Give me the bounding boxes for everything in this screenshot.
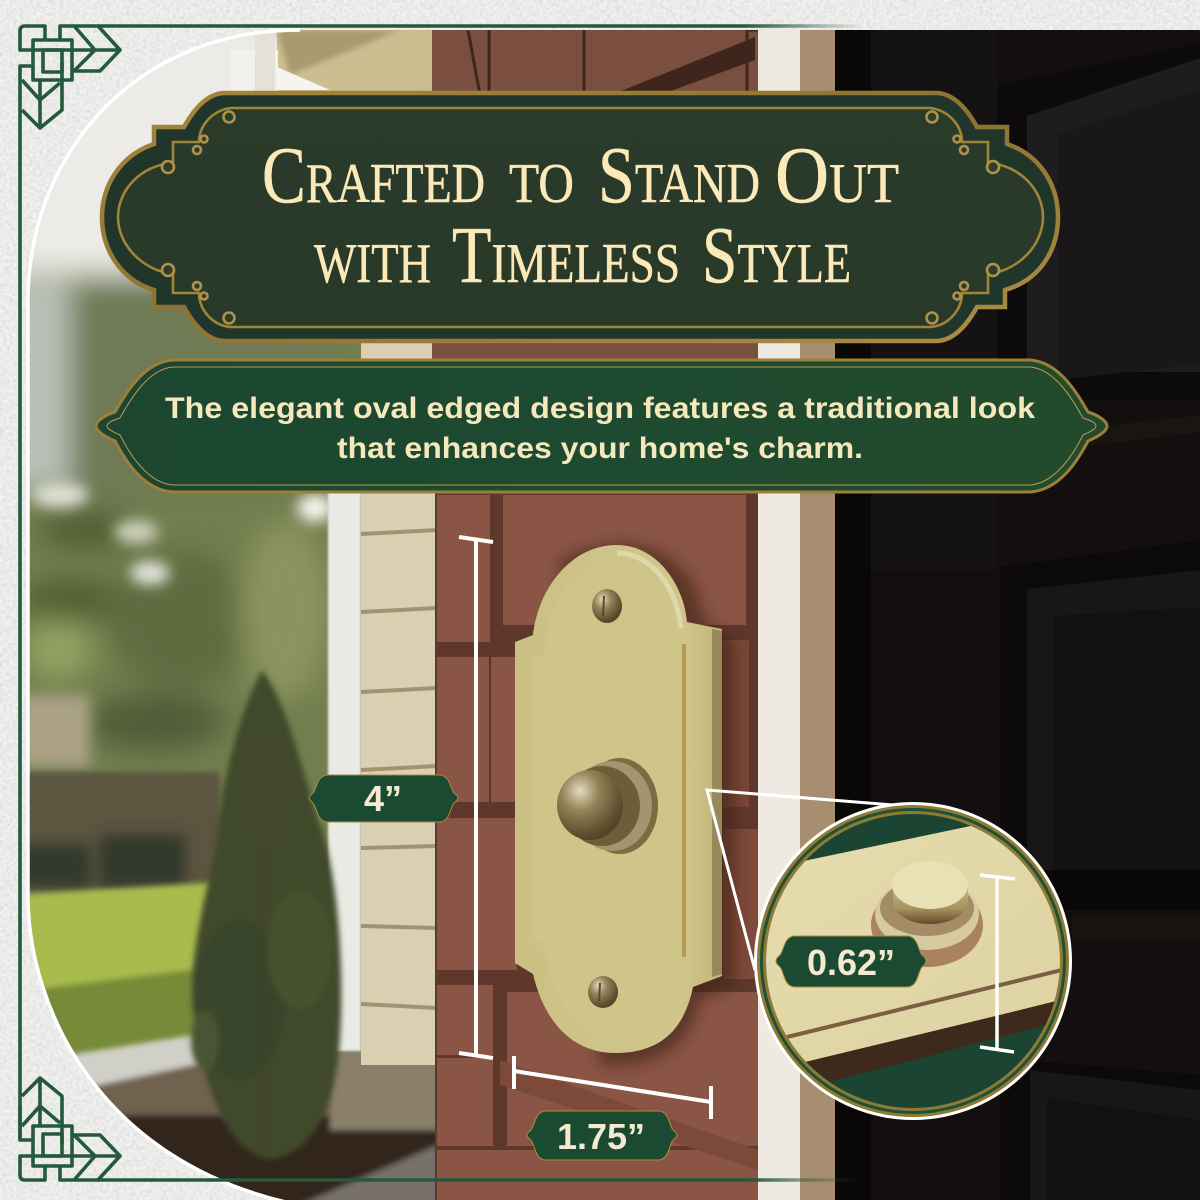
plate shadow xyxy=(560,544,735,1066)
callout inset circle xyxy=(750,790,1080,1130)
label: 4 inch: 4” xyxy=(364,778,402,819)
label: 0.62 inch xyxy=(776,936,926,987)
title text: WITH xyxy=(314,233,431,295)
brick wall xyxy=(432,30,760,1200)
garden background xyxy=(0,10,440,1200)
doorbell plate xyxy=(515,545,722,1053)
cream siding xyxy=(361,340,437,1065)
title plaque xyxy=(102,93,1058,341)
door trim xyxy=(758,30,836,1200)
inset dimension line xyxy=(980,875,1015,1052)
upper siding and gutter xyxy=(255,30,432,91)
evergreen shrub xyxy=(191,670,341,1160)
title text: CRAFTED xyxy=(262,132,485,220)
label: 1.75 inch xyxy=(527,1111,677,1160)
fence and hedge xyxy=(20,772,220,890)
title text: STAND xyxy=(598,132,760,220)
inset button cap xyxy=(892,861,968,924)
corner ornament: top left xyxy=(20,26,860,1140)
subtitle text xyxy=(165,392,1035,465)
subtitle text: The elegant oval edged design features a traditional look xyxy=(165,392,1035,425)
title text xyxy=(262,132,899,300)
white porch column xyxy=(328,480,361,1051)
bottom screw xyxy=(588,976,618,1008)
inset knurled base xyxy=(871,908,983,967)
callout leader lines xyxy=(707,790,893,970)
subtitle ribbon xyxy=(96,360,1107,492)
title text: TO xyxy=(509,153,574,215)
lower door panel xyxy=(1000,1058,1200,1200)
label: 1.75 inch: 1.75” xyxy=(557,1116,645,1157)
top screw xyxy=(592,589,622,623)
title text: STYLE xyxy=(702,212,851,300)
push button xyxy=(557,758,658,854)
width dimension line xyxy=(514,1056,711,1119)
lawn xyxy=(30,879,211,1054)
middle door panel xyxy=(1000,540,1200,880)
plaque inner panel xyxy=(118,108,1043,327)
title text: OUT xyxy=(775,132,899,220)
upper door panel xyxy=(1027,58,1200,378)
corner ornament: bottom left xyxy=(20,1078,860,1180)
subtitle text: that enhances your home's charm. xyxy=(337,432,863,465)
black door with panels xyxy=(835,30,1200,1200)
title text: TIMELESS xyxy=(452,212,680,300)
plaque scroll details xyxy=(162,112,999,324)
height dimension line xyxy=(459,537,493,1058)
label: 4 inch xyxy=(309,775,458,822)
path and lower bed xyxy=(74,1032,435,1200)
photo white edge xyxy=(28,30,300,1200)
label: 0.62 inch: 0.62” xyxy=(807,942,895,983)
